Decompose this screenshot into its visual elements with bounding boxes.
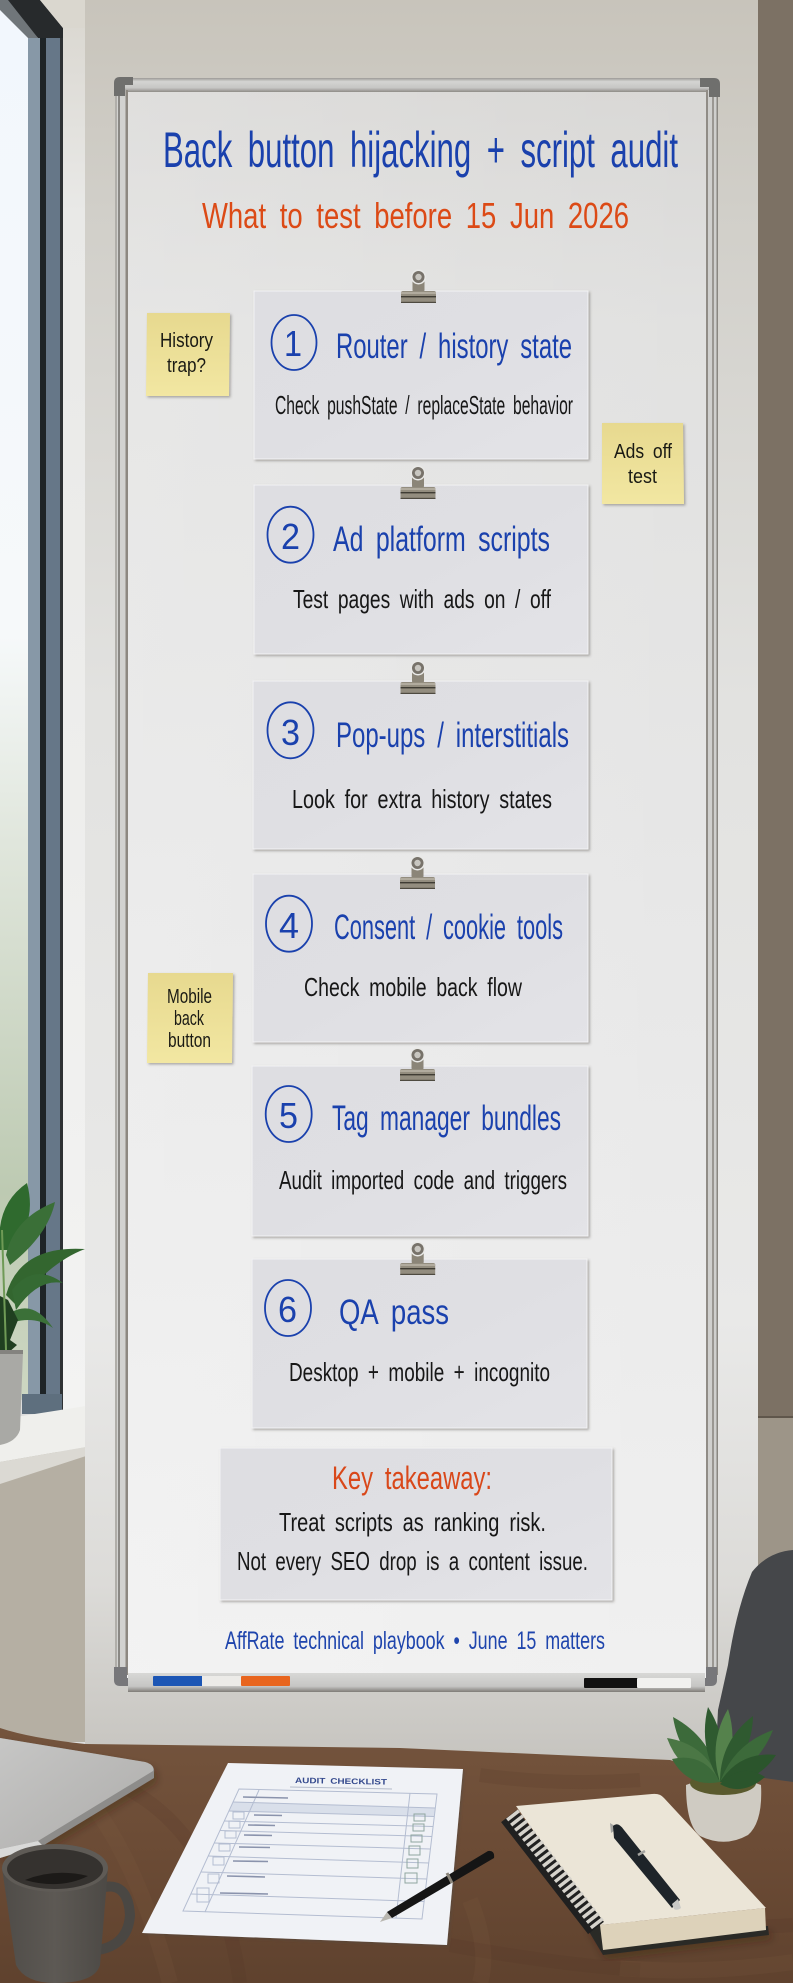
sticky note: ads off test: Ads off [614,441,672,463]
pen on paper [380,1851,494,1922]
step number 6: 6 [278,1289,297,1330]
footer line: AffRate technical playbook • June 15 matters [225,1627,605,1655]
step number 1 [272,315,316,370]
background: wall below sill [0,1452,86,1742]
binder clip 2 [400,466,436,499]
wooden desk [0,1728,793,1983]
board corner: bottom right [700,1667,717,1686]
board corner: top right [700,78,720,97]
subtitle: What to test before 15 Jun 2026 [202,195,629,236]
leaves [667,1707,776,1789]
step number 6 [265,1280,311,1336]
card 1 body: Check pushState / replaceState behavior [275,390,573,420]
audit checklist paper [142,1763,463,1945]
background: right wall [758,0,793,1758]
sticky note: history trap [146,313,230,396]
marker: blue and orange [153,1676,290,1686]
binder clip 6 [400,1242,435,1275]
checklist title: AUDIT CHECKLIST [295,1776,387,1787]
card 1 heading: Router / history state [336,327,572,366]
sticky note: ads off test: test [628,466,657,488]
card 5 heading: Tag manager bundles [332,1099,561,1138]
step number 5: 5 [279,1095,298,1136]
key takeaway card [220,1448,612,1600]
card 3 body: Look for extra history states [292,784,552,814]
marker: black [584,1678,691,1688]
pot [686,1778,761,1842]
board right rail [706,90,718,1675]
background: window sill [0,1406,86,1484]
card 4: consent / cookie tools [253,856,588,1042]
step number 4 [266,896,312,952]
background: window jamb [63,0,86,1410]
step number 3: 3 [281,712,300,753]
binder clip 1 [401,270,436,303]
board top rail [120,78,712,92]
spiral notebook [509,1794,769,1955]
board side light [120,85,712,1680]
binder clip 3 [400,660,436,694]
plant on window sill [0,1183,85,1445]
card 3 heading: Pop-ups / interstitials [336,716,569,755]
whiteboard [114,77,720,1692]
takeaway line 1: Treat scripts as ranking risk. [279,1507,546,1537]
step number 1: 1 [284,323,302,364]
step number 4: 4 [279,905,299,946]
takeaway line 2: Not every SEO drop is a content issue. [237,1546,588,1576]
card 2: ad platform scripts [254,466,588,654]
closed laptop [0,1738,154,1858]
sticky note: history trap: trap? [167,355,206,377]
checklist row labels [220,1797,288,1894]
card 6 body: Desktop + mobile + incognito [289,1357,550,1387]
desk plant in pot [667,1707,776,1842]
sticky note: mobile back button [147,973,233,1063]
checklist table [183,1787,437,1919]
notebook spiral binding [509,1814,599,1928]
step number 5 [266,1086,312,1142]
step number 3 [268,702,314,758]
coffee mug [2,1844,130,1983]
card 2 body: Test pages with ads on / off [293,584,552,614]
mug handle [98,1887,130,1950]
board corner: bottom left [114,1667,134,1686]
sticky note: mobile back button: button [168,1030,211,1052]
binder clip 5 [400,1048,435,1081]
card 2 heading: Ad platform scripts [333,520,550,559]
marker tray [128,1673,705,1692]
background: left window [0,0,63,1414]
office chair [714,1550,793,1790]
background: window jamb top [40,0,86,28]
card 5: tag manager bundles [252,1048,588,1236]
card 4 heading: Consent / cookie tools [334,908,563,947]
step number 2 [268,507,314,563]
sticky note: mobile back button: Mobile [167,986,212,1008]
step number 2: 2 [281,516,300,557]
card 1: router / history state [254,270,588,459]
sticky note: ads off test [602,423,684,504]
card 4 body: Check mobile back flow [304,972,522,1002]
card 3: pop-ups / interstitials [253,660,588,849]
background: main wall [85,0,758,1760]
board surface [120,85,712,1680]
card 5 body: Audit imported code and triggers [279,1165,567,1195]
card 6 heading: QA pass [339,1293,449,1332]
takeaway heading: Key takeaway: [332,1460,492,1496]
board left rail [115,90,128,1675]
board corner: top left [114,77,133,96]
card 6: QA pass [252,1242,587,1428]
sticky note: history trap: History [160,330,213,352]
sticky note: mobile back button: back [174,1008,205,1030]
binder clip 4 [400,856,435,889]
pen on notebook [610,1823,681,1910]
